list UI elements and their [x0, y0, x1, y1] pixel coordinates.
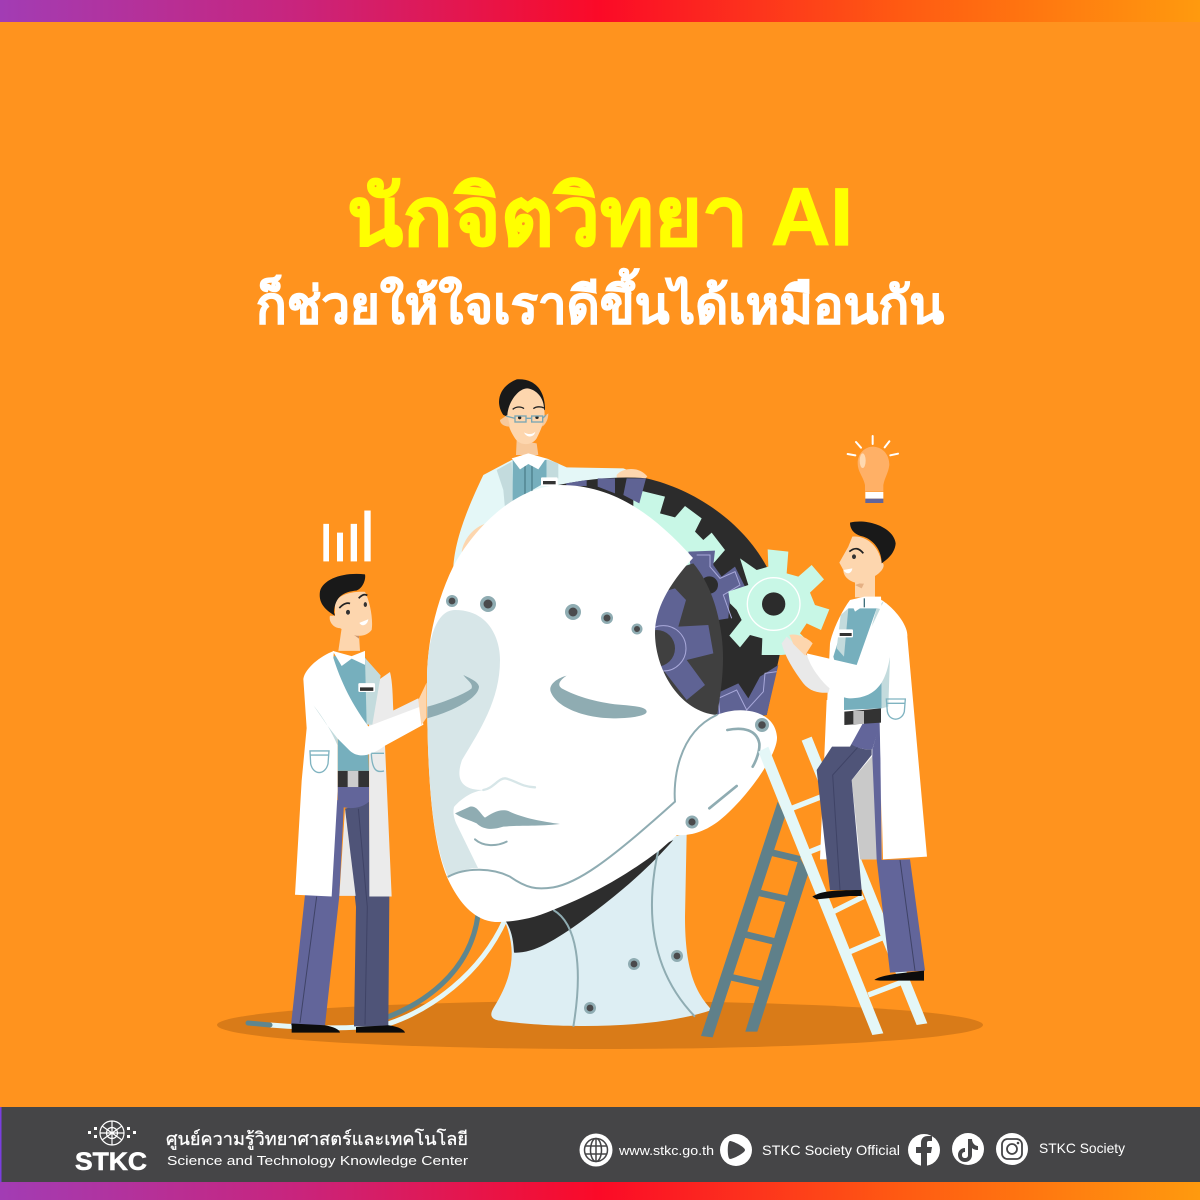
right eye	[550, 676, 647, 718]
brain shell	[558, 477, 780, 723]
center name thai: ศูนย์ความรู้วิทยาศาสตร์และเทคโนโลยี	[166, 1128, 468, 1150]
logo mark	[88, 1121, 136, 1145]
footer bar	[0, 1107, 1200, 1182]
robot face	[427, 485, 777, 922]
inner hemisphere	[655, 564, 723, 715]
ear lines	[709, 729, 759, 808]
website text: www.stkc.go.th	[618, 1143, 714, 1158]
brain and gears	[558, 477, 829, 723]
neck	[491, 833, 712, 1027]
mouth	[455, 806, 560, 829]
facial features	[427, 675, 717, 888]
icon: globe	[580, 1134, 612, 1166]
youtube text: STKC Society Official	[762, 1142, 900, 1158]
coat front and face	[782, 522, 927, 859]
top scientist	[453, 379, 647, 567]
face shading	[427, 610, 500, 877]
illustration	[217, 379, 983, 1049]
ladder	[701, 737, 927, 1037]
coat back and legs	[812, 700, 925, 981]
front ladder frame	[758, 737, 927, 1035]
icon: tiktok	[952, 1133, 984, 1165]
ground shadow	[217, 1001, 983, 1049]
left scientist	[291, 511, 427, 1033]
icon: play	[720, 1134, 752, 1166]
icon: facebook	[908, 1134, 940, 1166]
purple ring segments	[566, 478, 646, 503]
bar chart icon	[323, 511, 371, 561]
icon: instagram	[996, 1133, 1028, 1165]
subtitle: ก็ช่วยให้ใจเราดีขึ้นได้เหมือนกัน	[256, 268, 944, 334]
cables	[248, 915, 505, 1028]
purple gear	[688, 551, 745, 620]
rear ladder frame	[701, 802, 808, 1037]
lower purple gear	[713, 665, 778, 718]
front mint gear	[728, 549, 829, 655]
center name english: Science and Technology Knowledge Center	[167, 1153, 469, 1168]
large mint gear	[633, 490, 725, 583]
left eye	[427, 675, 479, 718]
bottom gradient bar	[0, 1182, 1200, 1200]
title: นักจิตวิทยา AI	[347, 172, 853, 263]
light bulb icon	[848, 436, 898, 503]
right scientist	[782, 436, 927, 981]
top gradient bar	[0, 0, 1200, 22]
instagram text: STKC Society	[1039, 1140, 1125, 1156]
logo wordmark: STKC	[75, 1148, 147, 1176]
bolts	[446, 595, 769, 1014]
